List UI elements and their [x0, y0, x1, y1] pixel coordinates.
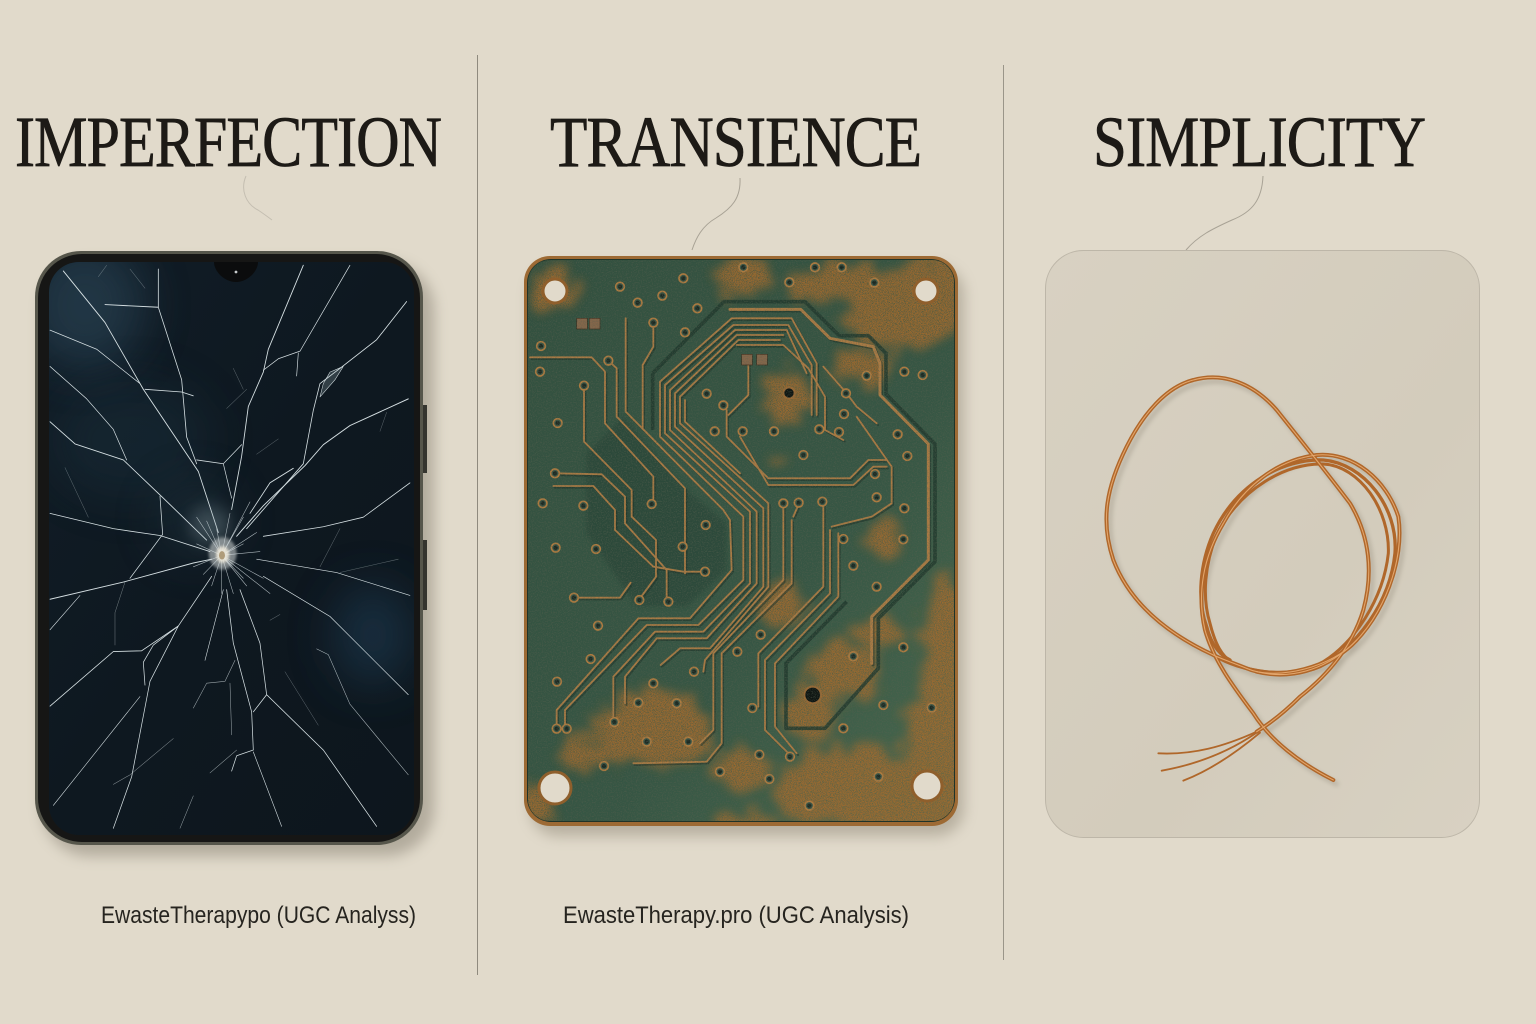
board edge — [524, 256, 958, 826]
board shadow — [530, 266, 964, 836]
heading: transience: TRANSIENCE — [550, 102, 921, 182]
copper traces — [531, 311, 930, 765]
connector: simplicity to panel — [1186, 176, 1263, 250]
dark region behind lower-left traces — [587, 417, 727, 607]
wire highlights — [1106, 377, 1400, 780]
heading: imperfection: IMPERFECTION — [15, 102, 441, 182]
drilled holes in centre — [783, 387, 821, 703]
heading: simplicity: SIMPLICITY — [1093, 102, 1425, 182]
phone shadow — [42, 262, 434, 856]
solder pads — [577, 318, 767, 365]
phone side buttons — [423, 405, 427, 610]
rust patches — [528, 260, 954, 821]
panel background — [1046, 250, 1480, 838]
column divider left — [476, 55, 478, 975]
phone notch and camera — [214, 262, 258, 282]
wire shadow — [1110, 381, 1403, 784]
crack impact point — [190, 502, 270, 594]
caption: middle column: EwasteTherapy.pro (UGC Analysis) — [563, 902, 909, 929]
phone body — [35, 251, 423, 845]
icon: corroded circuit board — [507, 253, 980, 857]
panel: copper wire — [1046, 250, 1480, 838]
wire strands — [1106, 377, 1400, 781]
connector: transience to board — [692, 178, 740, 250]
recessed channels — [653, 302, 935, 728]
caption: left column: EwasteTherapypo (UGC Analyss) — [101, 902, 416, 929]
surface grain — [524, 256, 958, 826]
board surface — [528, 260, 954, 821]
phone screen — [25, 240, 414, 835]
connector: imperfection to phone — [244, 176, 272, 220]
cracks — [50, 265, 410, 828]
icon: copper wire loops — [1106, 377, 1403, 784]
mounting holes — [539, 279, 942, 804]
column divider right — [1002, 65, 1004, 960]
icon: cracked phone — [25, 240, 434, 856]
vias — [540, 267, 932, 806]
